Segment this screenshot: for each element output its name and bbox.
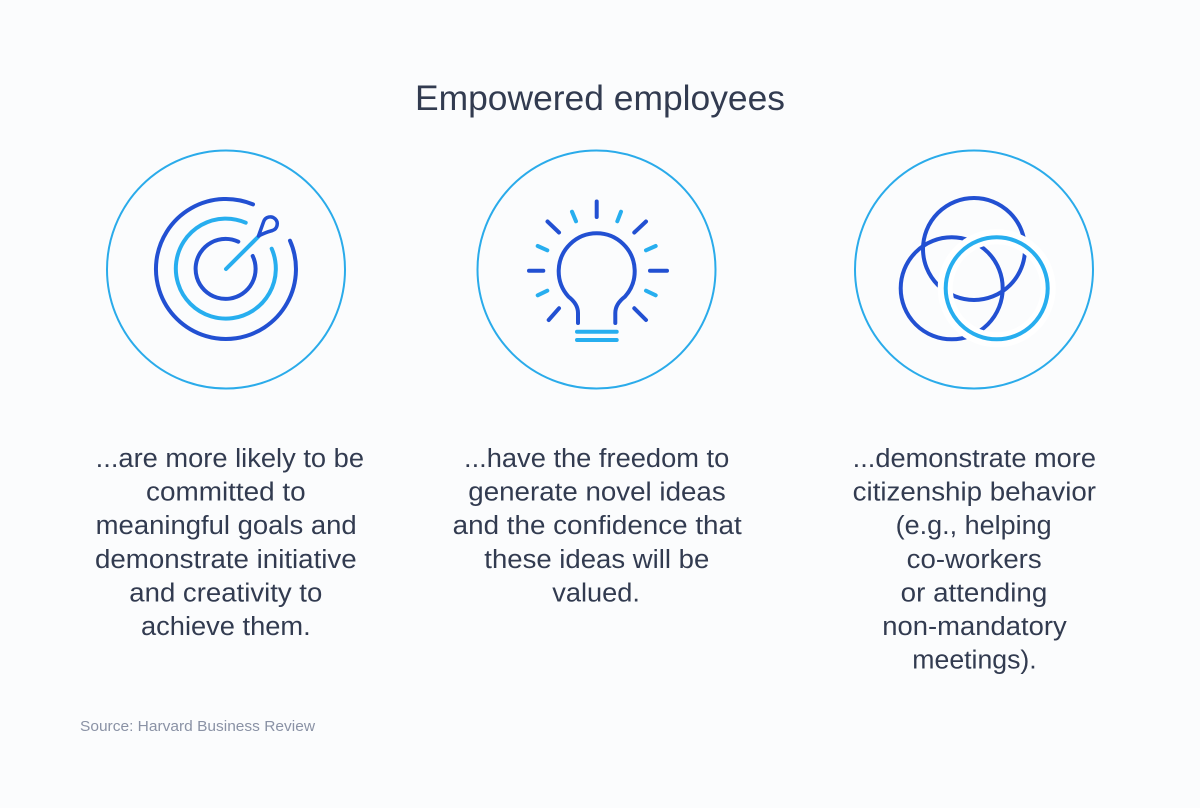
text: goals description: meaningful goals and (96, 512, 357, 540)
text: citizenship description: meetings). (912, 647, 1037, 675)
icon: light bulb (478, 150, 716, 388)
text: goals description: ...are more likely to be (96, 445, 364, 473)
text: ideas description: and the confidence that (453, 512, 742, 540)
text: goals description: and creativity to (129, 579, 322, 607)
text: ideas description: these ideas will be (484, 546, 709, 574)
text: citizenship description (853, 445, 1097, 675)
text: goals description: achieve them. (141, 613, 311, 641)
text: ideas description: ...have the freedom to (464, 445, 729, 473)
panel: ideas (453, 150, 742, 607)
text: citizenship description: co-workers (907, 546, 1042, 574)
text: citizenship description: citizenship behavior (853, 479, 1097, 507)
panel: citizenship (853, 150, 1097, 675)
text: citizenship description: or attending (901, 579, 1047, 607)
text: goals description: committed to (146, 479, 306, 507)
text: citizenship description: non-mandatory (882, 613, 1067, 641)
text: goals description: demonstrate initiative (95, 546, 357, 574)
source note: Source: Harvard Business Review (80, 718, 315, 735)
text: goals description (95, 445, 364, 641)
text: ideas description: generate novel ideas (468, 479, 726, 507)
title: Empowered employees (415, 79, 785, 118)
text: ideas description (453, 445, 742, 607)
text: ideas description: valued. (552, 579, 640, 607)
icon: target with dart (107, 150, 345, 388)
panel: goals (95, 150, 364, 641)
icon: overlapping circles (855, 150, 1093, 388)
text: citizenship description: (e.g., helping (896, 512, 1052, 540)
text: citizenship description: ...demonstrate more (853, 445, 1096, 473)
